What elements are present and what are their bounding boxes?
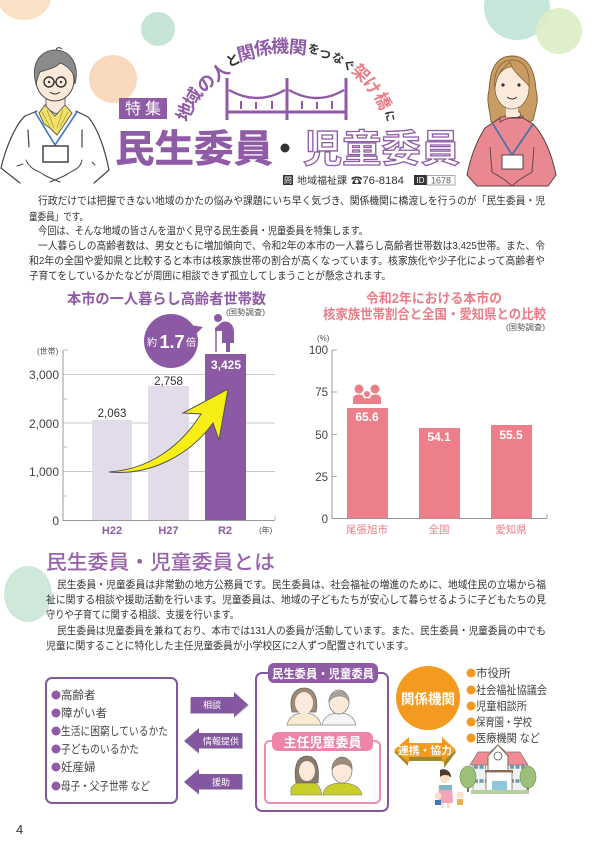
bar chart: nuclear family ratio: 55.5 bbox=[499, 428, 523, 442]
icon: family bbox=[353, 384, 381, 404]
label: special feature bbox=[119, 98, 167, 119]
list: related organizations: 医療機関 など bbox=[476, 731, 540, 745]
contact info: ☎76-8184 bbox=[351, 175, 404, 187]
bar chart: single elderly households: 1,000 bbox=[29, 465, 59, 479]
subtitle on arch: 橋 bbox=[370, 90, 395, 113]
subtitle on arch: け bbox=[359, 74, 384, 99]
callout: about 1.7 times: 倍 bbox=[186, 337, 196, 349]
callout: about 1.7 times bbox=[144, 314, 203, 368]
chart heading: nuclear family comparison: (国勢調査) bbox=[506, 322, 545, 332]
bar chart: single elderly households: 3,425 bbox=[211, 358, 241, 372]
callout: about 1.7 times: 約 bbox=[147, 336, 157, 349]
arrow: information: 情報提供 bbox=[203, 736, 239, 746]
bar chart: single elderly households: 2,000 bbox=[29, 417, 59, 431]
intro text block bbox=[29, 194, 545, 282]
bar chart: nuclear family ratio: 50 bbox=[315, 430, 328, 442]
subtitle on arch: 人 bbox=[207, 59, 233, 86]
panel: commissioners: 主任児童委員 bbox=[284, 735, 362, 750]
explanation text block bbox=[46, 578, 546, 652]
bar chart: nuclear family ratio: 65.6 bbox=[355, 410, 379, 424]
panel: people supported bbox=[46, 678, 177, 803]
illustration: female welfare commissioner bbox=[467, 56, 556, 186]
panel: commissioners: 民生委員・児童委員 bbox=[272, 666, 374, 681]
subtitle on arch: と bbox=[223, 50, 243, 70]
subtitle on arch: の bbox=[193, 70, 220, 97]
intro text block: 一人暮らしの高齢者数は、男女ともに増加傾向で、令和2年の本市の一人暮らし高齢者世帯数は3,425世帯。また、令 bbox=[38, 239, 545, 252]
subtitle on arch: つ bbox=[317, 46, 333, 63]
page number: 4 bbox=[16, 822, 23, 837]
title bbox=[115, 129, 460, 171]
title: 民生委員 bbox=[115, 129, 273, 171]
contact info: 問 bbox=[284, 176, 292, 185]
bar chart: nuclear family ratio: (%) bbox=[317, 334, 330, 343]
explanation text block: 守りや子育てに関する相談、支援を行います。 bbox=[46, 608, 239, 621]
bar chart: single elderly households: 2,063 bbox=[98, 408, 126, 420]
bar chart: single elderly households: H22 bbox=[102, 525, 122, 537]
subtitle on arch: 架 bbox=[348, 61, 373, 86]
illustration: school building bbox=[460, 745, 536, 794]
list: related organizations: 社会福祉協議会 bbox=[476, 683, 547, 697]
illustration: two chief child commissioners bbox=[291, 756, 362, 795]
list: related organizations bbox=[466, 666, 547, 745]
contact info: 1678 bbox=[431, 176, 451, 186]
illustration: male welfare commissioner bbox=[1, 48, 109, 183]
explanation text block: 祉に関する相談や援助活動を行います。児童委員は、地域の子どもたちが安心して暮らせるように子どもたちの見 bbox=[46, 593, 546, 606]
subtitle on arch: 地 bbox=[173, 100, 198, 124]
subtitle on arch: を bbox=[306, 41, 321, 58]
badge: related organizations: 関係機関 bbox=[401, 691, 455, 707]
illustration: caregiver with children bbox=[434, 769, 464, 808]
bar chart: single elderly households bbox=[29, 346, 275, 537]
panel: people supported: 母子・父子世帯 など bbox=[61, 780, 150, 793]
icon: bridge bbox=[227, 78, 346, 120]
arrow: assistance: 援助 bbox=[212, 776, 230, 788]
bar chart: nuclear family ratio bbox=[309, 334, 547, 536]
bar chart: single elderly households: 0 bbox=[52, 514, 59, 528]
title: 児童委員 bbox=[303, 129, 460, 171]
arrow: growth bbox=[109, 389, 228, 472]
intro text block: 童委員」です。 bbox=[29, 210, 88, 223]
decorative watercolor circles bbox=[0, 0, 582, 622]
list: related organizations: 保育園・学校 bbox=[476, 715, 532, 729]
bar chart: nuclear family ratio: 100 bbox=[309, 345, 328, 357]
intro text block: 今回は、そんな地域の皆さんを温かく見守る民生委員・児童委員を特集します。 bbox=[38, 224, 368, 237]
badge: related organizations bbox=[396, 666, 460, 730]
subtitle on arch: 域 bbox=[180, 84, 207, 110]
bar chart: nuclear family ratio: 54.1 bbox=[427, 430, 451, 444]
subtitle on arch: ぐ bbox=[340, 56, 358, 75]
subtitle on arch: に bbox=[382, 109, 397, 123]
explanation text block: 民生委員は児童委員を兼ねており、本市では131人の委員が活動しています。また、民生委員・児童委員の中でも bbox=[57, 624, 546, 637]
panel: people supported: 妊産婦 bbox=[61, 760, 96, 774]
contact info bbox=[283, 174, 455, 187]
callout: about 1.7 times: 1.7 bbox=[159, 332, 185, 352]
subtitle on arch: 係 bbox=[253, 37, 273, 60]
chart heading: single elderly households: 本市の一人暮らし高齢者世帯数 bbox=[67, 290, 266, 308]
panel: people supported: 子どものいるかた bbox=[61, 743, 139, 756]
arrow: cooperation: 連携・協力 bbox=[398, 744, 452, 757]
chart heading: nuclear family comparison: 令和2年における本市の bbox=[366, 290, 502, 306]
chart heading: single elderly households bbox=[67, 290, 266, 317]
bar chart: nuclear family ratio: 75 bbox=[315, 387, 328, 399]
arrow: consultation: 相談 bbox=[203, 699, 221, 710]
chart heading: single elderly households: (国勢調査) bbox=[226, 307, 265, 317]
subtitle on arch: 機 bbox=[271, 36, 289, 57]
bar chart: nuclear family ratio: 愛知県 bbox=[495, 523, 527, 536]
intro text block: 子育てをしているかたなどが周囲に相談できず孤立してしまうことが懸念されます。 bbox=[29, 269, 391, 282]
panel: people supported: 高齢者 bbox=[61, 688, 96, 702]
subtitle on arch: 関 bbox=[288, 37, 308, 58]
intro text block: 和2年の全国や愛知県と比較すると本市は核家族世帯の割合が高くなっています。核家族化や少子化によって高齢者や bbox=[29, 254, 545, 267]
arrow: consultation bbox=[190, 692, 249, 718]
panel: people supported: 生活に困窮しているかた bbox=[61, 724, 168, 738]
bar chart: nuclear family ratio: 尾張旭市 bbox=[346, 523, 388, 536]
bar chart: nuclear family ratio: 全国 bbox=[428, 523, 450, 536]
subtitle on arch: な bbox=[329, 49, 346, 67]
bar chart: single elderly households: 2,758 bbox=[154, 376, 183, 388]
panel: people supported: 障がい者 bbox=[61, 706, 107, 720]
illustration: two commissioners bbox=[287, 688, 356, 725]
section heading: 民生委員・児童委員とは bbox=[46, 551, 275, 574]
bar chart: single elderly households: H27 bbox=[158, 525, 179, 537]
intro text block: 行政だけでは把握できない地域のかたの悩みや課題にいち早く気づき、関係機関に橋渡しを行うのが「民生委員・児 bbox=[38, 194, 545, 207]
explanation text block: 民生委員・児童委員は非常勤の地方公務員です。民生委員は、社会福祉の増進のために、地域住民の立場から福 bbox=[57, 578, 546, 591]
arrow: cooperation bbox=[394, 737, 456, 768]
bar chart: single elderly households: (年) bbox=[259, 525, 273, 535]
bar chart: nuclear family ratio: 25 bbox=[315, 472, 328, 484]
bar chart: single elderly households: (世帯) bbox=[37, 346, 59, 356]
list: related organizations: 児童相談所 bbox=[476, 699, 527, 713]
subtitle on arch bbox=[173, 36, 397, 124]
bar chart: nuclear family ratio: 0 bbox=[322, 514, 328, 526]
list: related organizations: 市役所 bbox=[476, 666, 511, 680]
subtitle on arch: 関 bbox=[235, 42, 257, 65]
chart heading: nuclear family comparison bbox=[323, 290, 546, 332]
label: special feature: 特集 bbox=[125, 100, 161, 118]
arrow: information bbox=[184, 728, 243, 754]
arrow: assistance bbox=[184, 769, 243, 795]
panel: commissioners bbox=[256, 663, 388, 811]
bar chart: single elderly households: 3,000 bbox=[29, 368, 59, 382]
contact info: 地域福祉課 bbox=[297, 174, 347, 187]
contact info: ID bbox=[416, 176, 425, 185]
icon: elderly person with cane bbox=[214, 314, 234, 352]
explanation text block: 児童に関することに特化した主任児童委員が小学校区に2人ずつ配置されています。 bbox=[46, 639, 414, 652]
bar chart: single elderly households: R2 bbox=[218, 525, 232, 537]
chart heading: nuclear family comparison: 核家族世帯割合と全国・愛知県との比較 bbox=[323, 306, 546, 322]
